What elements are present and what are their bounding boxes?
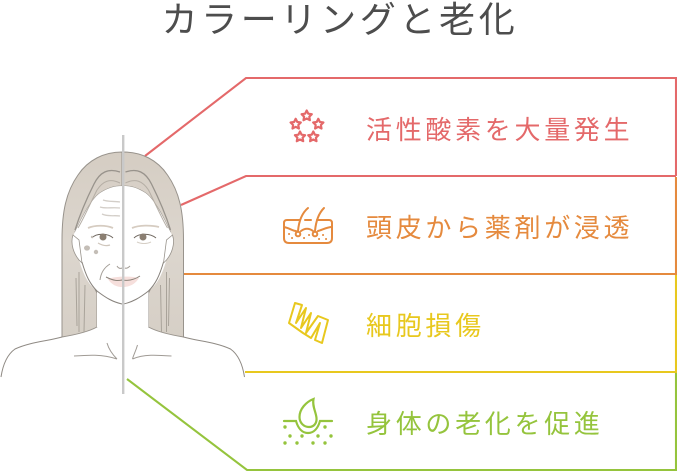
centre divider [122,135,124,394]
hair and face left half [1,152,122,377]
icon: follicle drop [284,399,332,433]
row 2 [284,208,633,243]
orange connector frame [182,177,676,274]
row 4 [283,399,604,445]
label: from scalp: 頭皮から薬剤が浸透 [366,213,633,243]
icon: cells [289,303,328,343]
row 1 [291,110,633,145]
hair and face right half [124,152,244,377]
icon dots [283,425,333,445]
age spots [84,236,98,254]
label: aging: 身体の老化を促進 [366,409,604,439]
red connector frame: top [145,78,676,176]
illustration: woman's face half aged [1,135,244,394]
icon: flowers [291,110,323,141]
mouth [106,276,140,287]
green connector frame [127,373,676,470]
wrinkles on forehead [100,200,120,216]
nose and smile lines [100,264,130,280]
label: cell damage: 細胞損傷 [366,311,485,341]
yellow connector frame [245,275,676,372]
red connector frame: second [181,176,676,205]
right eye and brow [132,226,159,244]
title: カラーリングと老化 [162,0,518,40]
label: active oxygen: 活性酸素を大量発生 [366,115,633,145]
icon: scalp [284,208,332,243]
left eye and brow [88,226,113,246]
row 3 [289,303,485,343]
